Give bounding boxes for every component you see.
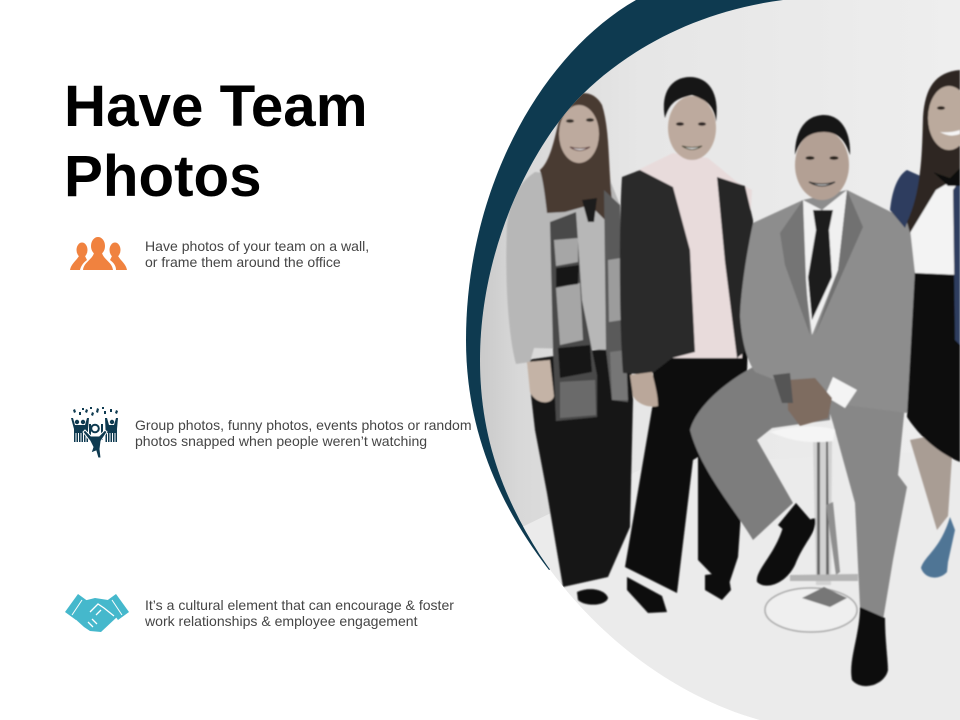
text: team photos on a wall: or frame them around the office bbox=[145, 254, 341, 270]
navy arc bbox=[466, 0, 800, 570]
torso bbox=[740, 190, 922, 413]
person: woman in black blazer bbox=[620, 77, 754, 613]
text: team photos on a wall bbox=[145, 238, 369, 270]
icon: handshake bbox=[65, 594, 129, 632]
text: group photos bbox=[135, 417, 472, 449]
bar stool bbox=[765, 426, 858, 632]
head bbox=[795, 130, 849, 200]
team photo bbox=[470, 0, 960, 720]
scarf bbox=[550, 212, 597, 421]
text: group photos: Group photos, funny photos, events photos or random bbox=[135, 417, 472, 433]
person: seated man in grey suit bbox=[690, 115, 922, 686]
icon: celebrating crowd bbox=[71, 407, 118, 458]
title: Photos bbox=[64, 144, 262, 209]
hands bbox=[787, 378, 832, 426]
icon: team of three people bbox=[70, 237, 127, 270]
person: woman with scarf bbox=[506, 93, 633, 605]
legs bbox=[690, 367, 830, 540]
title bbox=[64, 74, 368, 209]
person: woman at right edge bbox=[890, 70, 960, 578]
photo background bbox=[470, 0, 960, 720]
text: cultural element: It’s a cultural element that can encourage & foster bbox=[145, 597, 454, 613]
text: cultural element: work relationships & employee engagement bbox=[145, 613, 418, 629]
text: cultural element bbox=[145, 597, 454, 629]
text: group photos: photos snapped when people weren’t watching bbox=[135, 433, 427, 449]
title: Have Team bbox=[64, 74, 368, 139]
photo panel: navy arc and team photo bbox=[466, 0, 960, 720]
text: team photos on a wall: Have photos of your team on a wall, bbox=[145, 238, 369, 254]
